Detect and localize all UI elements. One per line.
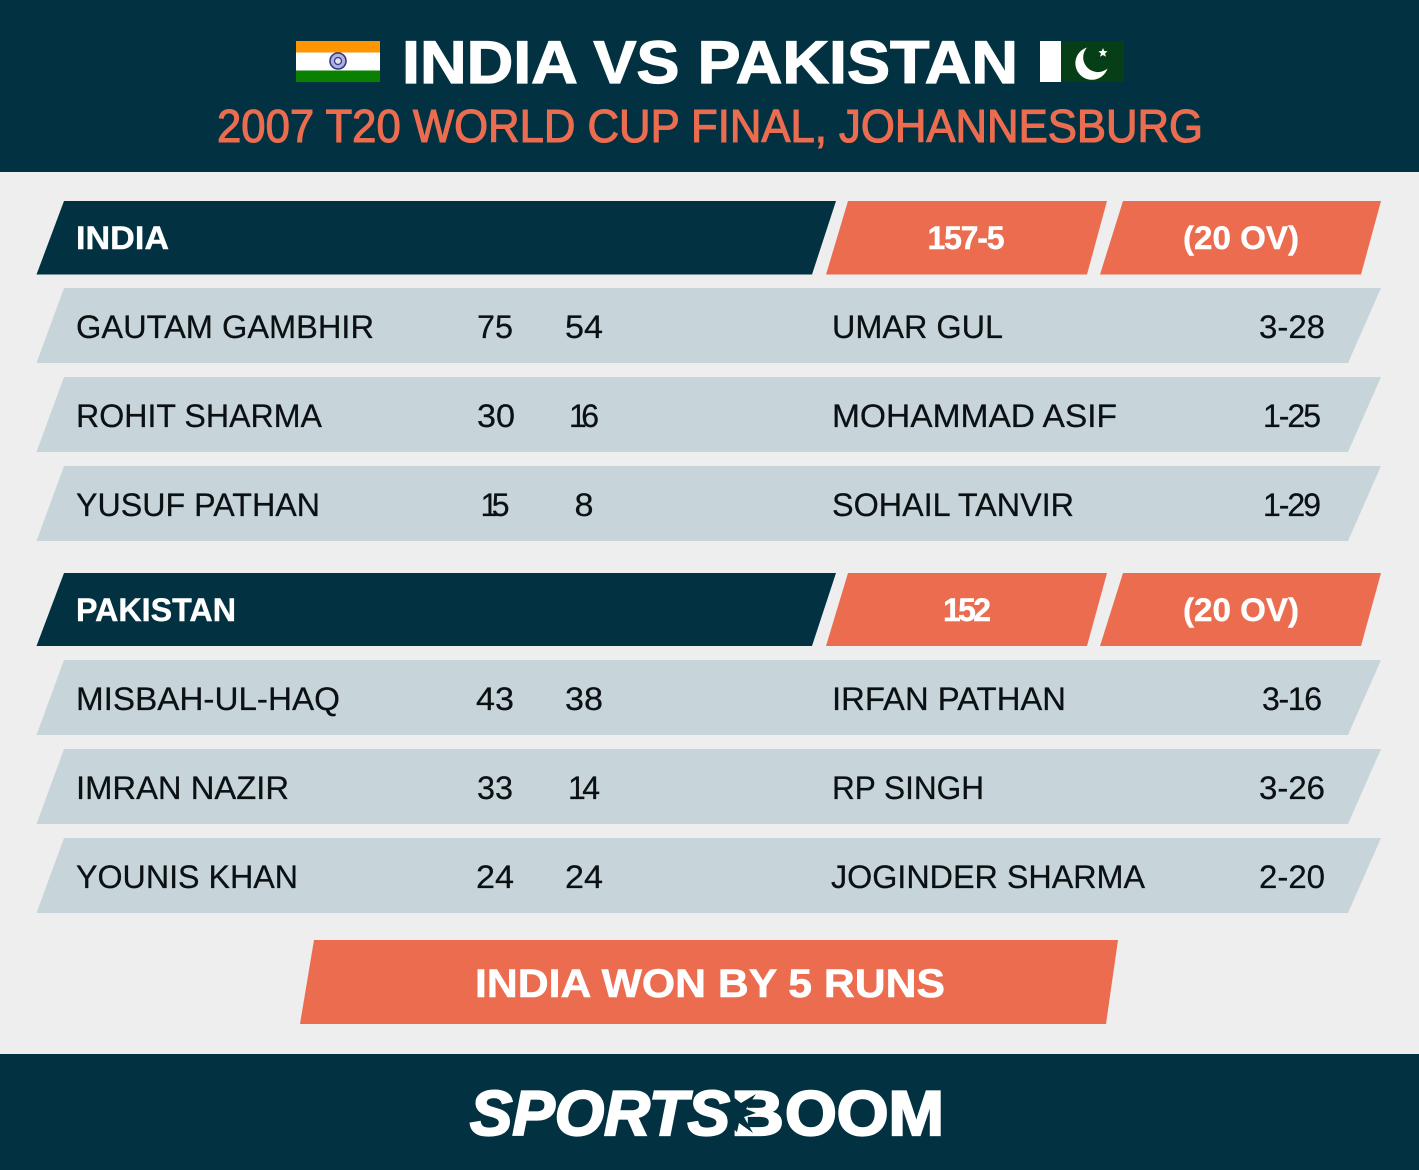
India team header: INDIA [76,220,169,256]
callout: result [300,940,1118,1024]
header band [0,0,1419,172]
row: Gambhir / Umar Gul: GAUTAM GAMBHIR [76,309,374,345]
row: Gambhir / Umar Gul: 75 [477,309,513,345]
row: Nazir / RP Singh: 3-26 [1259,770,1325,806]
icon: Pakistan flag [1040,41,1124,82]
Pakistan overs [1100,573,1381,646]
callout: result: INDIA WON BY 5 RUNS [475,962,945,1006]
panel: Pakistan scorecard [36,573,1381,913]
row: Misbah / Irfan Pathan [36,660,1381,735]
logo: Sportsboom: SPORTS [470,1079,730,1149]
row: Yusuf Pathan / Tanvir [36,466,1381,541]
Pakistan score [826,573,1107,646]
icon: India flag [296,41,380,82]
India overs [1100,201,1381,274]
footer band [0,1054,1419,1170]
row: Younis Khan / Joginder Sharma: JOGINDER SHARMA [831,859,1146,895]
row: Yusuf Pathan / Tanvir: YUSUF PATHAN [76,487,320,523]
row: Younis Khan / Joginder Sharma: 24 [565,859,603,895]
row: Gambhir / Umar Gul: 3-28 [1259,309,1325,345]
row: Sharma / Asif: ROHIT SHARMA [76,398,323,434]
row: Misbah / Irfan Pathan: 3-16 [1262,681,1322,717]
row: Yusuf Pathan / Tanvir: 1-29 [1263,487,1321,523]
India score: 157-5 [928,220,1004,256]
row: Younis Khan / Joginder Sharma [36,838,1381,913]
row: Misbah / Irfan Pathan: 43 [476,681,514,717]
row: Sharma / Asif: 16 [569,398,599,434]
Pakistan overs: (20 OV) [1183,592,1299,628]
row: Gambhir / Umar Gul: UMAR GUL [832,309,1003,345]
row: Nazir / RP Singh: RP SINGH [832,770,984,806]
row: Nazir / RP Singh: 33 [477,770,513,806]
row: Sharma / Asif: MOHAMMAD ASIF [832,398,1117,434]
logo: Sportsboom [470,1079,944,1149]
India score [826,201,1107,274]
logo: Sportsboom: OOM [785,1079,944,1149]
icon: logo burst [727,1094,756,1133]
row: Gambhir / Umar Gul [36,288,1381,363]
Pakistan team header [36,573,836,646]
subtitle: 2007 T20 WORLD CUP FINAL, JOHANNESBURG [217,100,1203,152]
row: Sharma / Asif: 30 [477,398,515,434]
row: Misbah / Irfan Pathan: IRFAN PATHAN [832,681,1066,717]
row: Gambhir / Umar Gul: 54 [565,309,603,345]
row: Yusuf Pathan / Tanvir: 15 [480,487,510,523]
Pakistan team header: PAKISTAN [76,592,236,628]
row: Sharma / Asif [36,377,1381,452]
row: Yusuf Pathan / Tanvir: 8 [574,487,594,523]
row: Younis Khan / Joginder Sharma: YOUNIS KHAN [76,859,298,895]
row: Younis Khan / Joginder Sharma: 2-20 [1259,859,1325,895]
India team header [36,201,836,274]
row: Yusuf Pathan / Tanvir: SOHAIL TANVIR [832,487,1074,523]
row: Nazir / RP Singh: IMRAN NAZIR [76,770,289,806]
India overs: (20 OV) [1183,220,1299,256]
title: INDIA VS PAKISTAN [402,29,1018,96]
row: Sharma / Asif: 1-25 [1263,398,1321,434]
row: Misbah / Irfan Pathan: MISBAH-UL-HAQ [76,681,340,717]
Pakistan score: 152 [943,592,991,628]
logo: Sportsboom: B [731,1079,784,1149]
row: Younis Khan / Joginder Sharma: 24 [476,859,514,895]
row: Nazir / RP Singh [36,749,1381,824]
panel: India scorecard [36,201,1381,541]
row: Nazir / RP Singh: 14 [568,770,600,806]
row: Misbah / Irfan Pathan: 38 [565,681,603,717]
